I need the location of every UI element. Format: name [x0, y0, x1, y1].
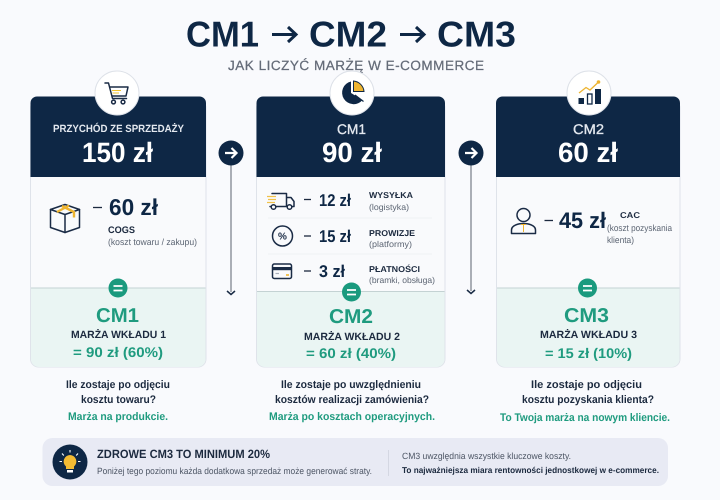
cost: CAC	[544, 208, 672, 245]
result area: CM2	[257, 292, 444, 367]
arrow: second to third	[458, 140, 484, 294]
result area: CM3: MARŻA WKŁADU 3	[540, 329, 637, 341]
header: 60 zł: CM2	[573, 121, 604, 137]
caption: CM1: Marża na produkcie.	[68, 411, 168, 423]
cost: COGS: (koszt towaru / zakupu)	[108, 237, 197, 247]
title: CM1	[186, 14, 259, 54]
divider row 2	[268, 253, 432, 255]
caption: CM1: Ile zostaje po odjęciu	[66, 379, 170, 391]
row: płatności: 3 zł	[319, 262, 345, 281]
icon: growth chart	[567, 71, 611, 115]
row: płatności: (bramki, obsługa)	[369, 275, 435, 285]
caption: CM2	[269, 379, 435, 423]
result area: CM1: CM1	[96, 305, 139, 327]
cost: COGS	[93, 194, 197, 247]
row: wysyłka: WYSYŁKA	[369, 190, 413, 200]
cost: COGS: COGS	[108, 225, 135, 236]
row: płatności: PŁATNOŚCI	[369, 264, 420, 274]
caption: CM2: kosztów realizacji zamówienia?	[275, 394, 429, 406]
caption: CM2: Marża po kosztach operacyjnych.	[269, 411, 435, 423]
result area: CM2: CM2	[329, 306, 373, 328]
caption: CM3	[500, 379, 670, 424]
icon: equals	[108, 278, 128, 298]
panel: przychód ze sprzedaży	[30, 71, 206, 367]
result area: CM2: = 60 zł (40%)	[306, 345, 396, 361]
header: 60 zł: 60 zł	[558, 137, 618, 168]
divider row 1	[268, 217, 432, 219]
result area: CM3: CM3	[564, 305, 609, 327]
caption: CM3: Ile zostaje po odjęciu	[531, 379, 642, 391]
result area: CM1: MARŻA WKŁADU 1	[71, 329, 166, 341]
icon: person	[512, 208, 536, 234]
caption: CM1: kosztu towaru?	[81, 394, 156, 406]
result area: CM2: MARŻA WKŁADU 2	[304, 331, 400, 343]
callout: minimum 20%: CM3 uwzględnia wszystkie kluczowe koszty.	[402, 451, 571, 461]
header: 90 zł	[256, 96, 445, 177]
header: 90 zł: 90 zł	[322, 137, 382, 168]
header: 150 zł: PRZYCHÓD ZE SPRZEDAŻY	[53, 122, 184, 135]
callout: minimum 20%: To najważniejsza miara rentowności jednostkowej w e-commerce.	[402, 465, 659, 475]
icon: pie chart	[330, 71, 374, 115]
panel: CM1	[256, 71, 445, 367]
cost: CAC: CAC	[620, 210, 640, 220]
result area: CM3	[497, 288, 680, 367]
callout: minimum 20%: ZDROWE CM3 TO MINIMUM 20%	[97, 447, 270, 461]
row: prowizje: PROWIZJE	[369, 228, 415, 238]
caption: CM1	[66, 379, 170, 423]
row: wysyłka	[267, 190, 413, 212]
header: 150 zł	[30, 96, 206, 177]
caption: CM3: To Twoja marża na nowym kliencie.	[500, 412, 670, 424]
icon: light bulb	[52, 444, 88, 480]
row: wysyłka: (logistyka)	[369, 202, 409, 212]
arrow: first to second	[218, 140, 244, 294]
icon: equals	[578, 278, 597, 298]
cost: CAC: (koszt pozyskania	[607, 223, 672, 233]
cost: CAC: klienta)	[607, 235, 634, 245]
result area: CM3: = 15 zł (10%)	[545, 345, 632, 361]
callout: minimum 20%: Poniżej tego poziomu każda dodatkowa sprzedaż może generować straty.	[97, 466, 372, 476]
row: prowizje: 15 zł	[319, 227, 351, 246]
callout: minimum 20%	[42, 438, 668, 486]
title	[186, 14, 516, 54]
result area: CM1: = 90 zł (60%)	[73, 344, 163, 360]
cost: COGS: 60 zł	[109, 194, 159, 220]
row: płatności	[272, 262, 435, 285]
title: CM3	[437, 14, 516, 54]
row: wysyłka: 12 zł	[319, 191, 351, 210]
subtitle: JAK LICZYĆ MARŻĘ W E-COMMERCE	[228, 58, 484, 73]
title: CM2	[309, 14, 387, 54]
icon: shopping cart	[95, 71, 139, 115]
header: 150 zł: 150 zł	[82, 137, 153, 168]
header: 90 zł: CM1	[337, 121, 366, 137]
result area: CM1	[31, 288, 206, 367]
icon: equals	[342, 282, 361, 302]
row: prowizje	[272, 226, 415, 249]
panel: CM2	[496, 71, 680, 367]
row: prowizje: (platformy)	[369, 239, 412, 249]
cost: CAC: 45 zł	[559, 208, 607, 233]
row: prowizje: %	[278, 232, 287, 242]
icon: box	[50, 204, 80, 232]
caption: CM3: kosztu pozyskania klienta?	[522, 394, 654, 406]
caption: CM2: Ile zostaje po uwzględnieniu	[281, 379, 421, 391]
header: 60 zł	[496, 96, 680, 177]
